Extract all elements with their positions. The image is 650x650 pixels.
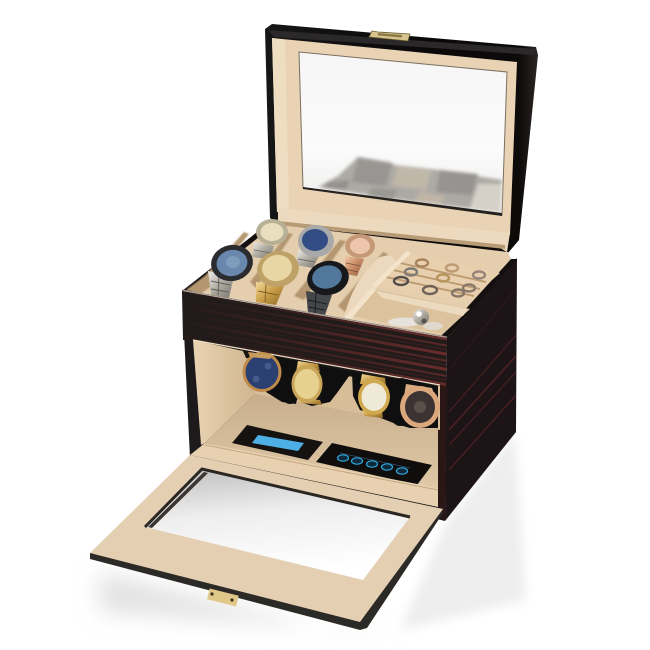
lid outer frame: [265, 24, 538, 253]
watch: black blue front right: [304, 257, 352, 315]
compartment top highlight: [193, 340, 440, 385]
door dark edge: [90, 508, 443, 630]
winder watch 2 gold: [292, 361, 322, 405]
LCD control panel: [232, 425, 323, 460]
compartment floor: [205, 394, 438, 490]
box front left column and panel: [182, 291, 447, 521]
jewelry tray divider: [372, 251, 411, 288]
lid beige lining: [272, 38, 517, 235]
watch pillow slots: [186, 232, 388, 312]
door glass: [145, 469, 410, 580]
floor shadow: [100, 432, 526, 632]
watch: gold front middle: [254, 247, 302, 305]
touch control panel: [316, 443, 432, 485]
lid: [265, 24, 538, 253]
watch: champagne back left: [252, 219, 288, 259]
rings: [394, 260, 485, 296]
product photo: watch winder jewelry box: [90, 24, 538, 630]
touch button 2: [352, 458, 362, 464]
winder compartment: [190, 340, 440, 507]
watch pillow right end: [344, 256, 396, 320]
touch button 4: [382, 464, 392, 470]
mirror reflection of watches: [318, 157, 502, 212]
compartment left wall: [193, 340, 255, 445]
ring tray: [375, 254, 500, 302]
watch: blue dial silver front left: [208, 241, 256, 298]
lid lower ledge: [278, 208, 510, 252]
dark rim back: [182, 222, 275, 291]
upper tray: [182, 208, 517, 338]
touch button 1: [338, 455, 348, 461]
touch button 5: [396, 468, 408, 474]
pearl bracelet and ball: [388, 309, 443, 330]
door beige lining: [90, 455, 443, 622]
winder watch 4 rose gold: [400, 384, 440, 428]
touch button 3: [366, 461, 378, 467]
tray base: [187, 223, 512, 336]
watch: blue back middle: [296, 225, 334, 268]
lid glass window: [299, 52, 507, 215]
lid clasp: [369, 31, 410, 41]
front wood band: [182, 291, 447, 386]
watch: rose gold back right: [345, 234, 375, 276]
front lip: [190, 443, 438, 507]
winder watch 1 blue gold: [242, 352, 282, 392]
right front post: [438, 385, 447, 521]
winder watch 3 white gold: [358, 374, 390, 418]
front door flap: [90, 455, 443, 630]
box right side: [445, 258, 517, 521]
LCD screen: [252, 435, 304, 451]
compartment back wall: [240, 352, 440, 430]
jewelry compartment: [345, 287, 470, 334]
top rim highlight: [182, 290, 447, 337]
black winder pods: [266, 356, 438, 428]
dark ceiling shadow: [243, 351, 438, 392]
door clasp: [207, 589, 239, 606]
